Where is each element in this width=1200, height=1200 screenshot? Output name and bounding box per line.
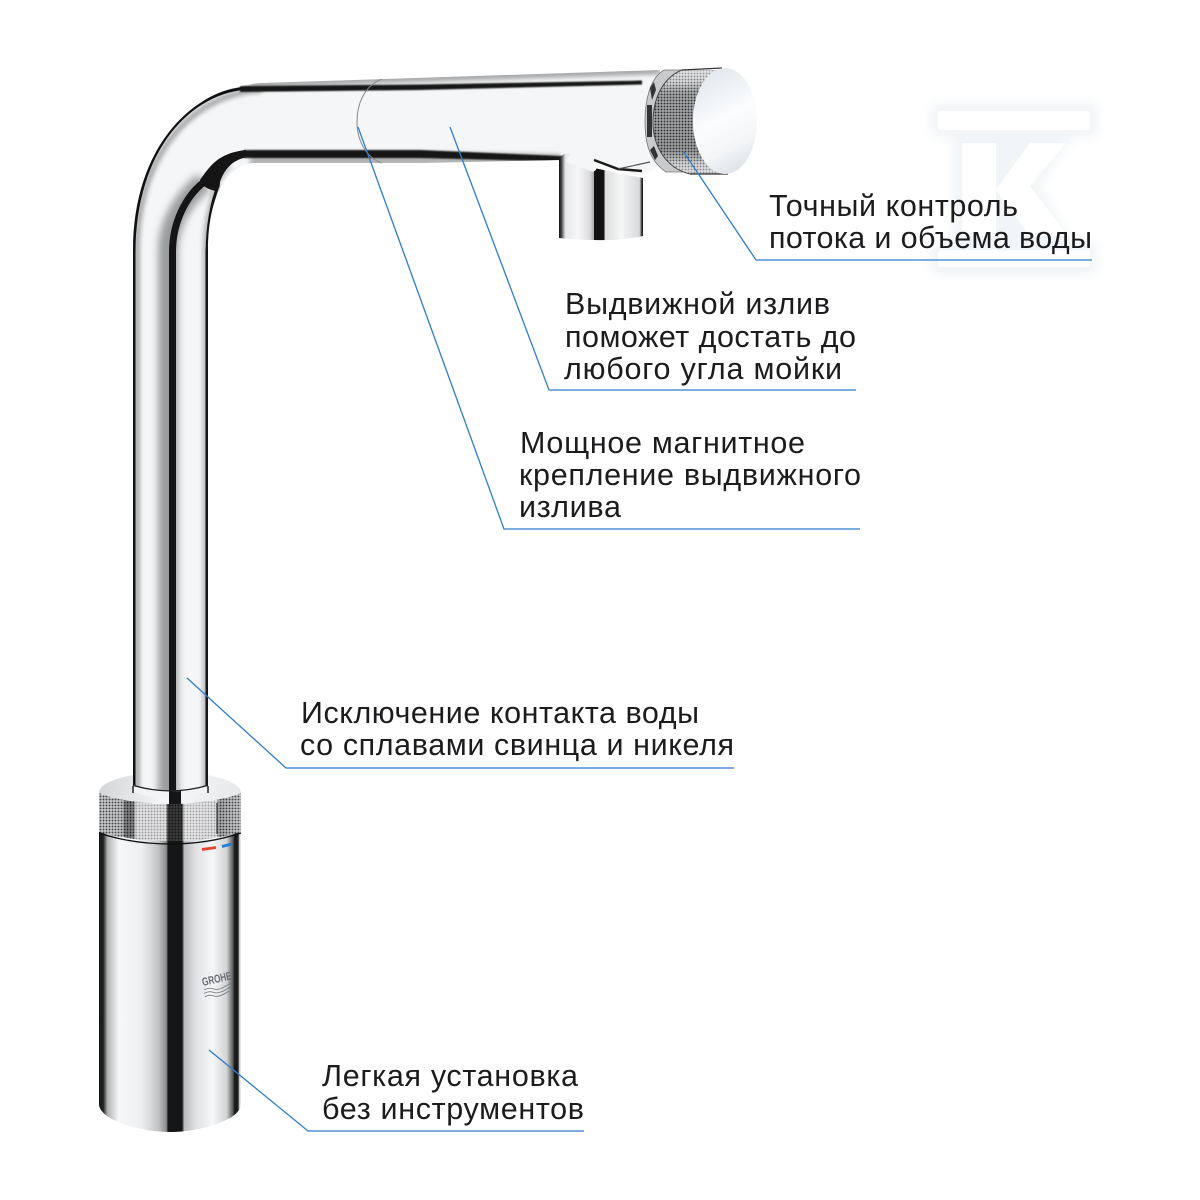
- faucet illustration: [99, 68, 757, 1132]
- callout: pull-out spout: Выдвижной излив: [565, 287, 830, 321]
- watermark logo: [930, 102, 1098, 276]
- hot mark: [202, 848, 216, 850]
- spout collar inside cap: [133, 786, 208, 804]
- callout: flow control: потока и объема воды: [769, 221, 1092, 255]
- knurled ring: [99, 793, 241, 844]
- callout: lead and nickel: Исключение контакта воды: [301, 696, 699, 730]
- magnetic joint seam: [357, 79, 382, 163]
- callout: flow control: [683, 151, 1092, 260]
- pull-out spout tube: [133, 69, 660, 830]
- callout: lead and nickel: [187, 678, 734, 768]
- callout: flow control: Точный контроль: [769, 189, 1018, 223]
- GROHE logo: [201, 970, 233, 997]
- top cap: [99, 772, 241, 808]
- cold mark: [222, 844, 232, 846]
- callout: easy installation: Легкая установка: [322, 1059, 578, 1093]
- control knob: [645, 68, 757, 174]
- callout: pull-out spout: поможет достать до: [565, 320, 856, 354]
- callout: magnetic mount: [358, 127, 861, 529]
- collar reflections: [647, 82, 658, 160]
- callout: magnetic mount: крепление выдвижного: [519, 458, 861, 492]
- callout: magnetic mount: Мощное магнитное: [520, 426, 805, 460]
- callout: easy installation: [209, 1050, 584, 1131]
- base body: [99, 772, 241, 1132]
- callout: lead and nickel: со сплавами свинца и никеля: [300, 728, 734, 762]
- callout: pull-out spout: любого угла мойки: [564, 352, 842, 386]
- callout: easy installation: без инструментов: [322, 1092, 584, 1126]
- outlet nozzle: [559, 146, 650, 240]
- callout: magnetic mount: излива: [519, 490, 621, 524]
- GROHE logo: GROHE: [201, 970, 233, 989]
- collar: [645, 70, 682, 172]
- callout: pull-out spout: [450, 127, 856, 390]
